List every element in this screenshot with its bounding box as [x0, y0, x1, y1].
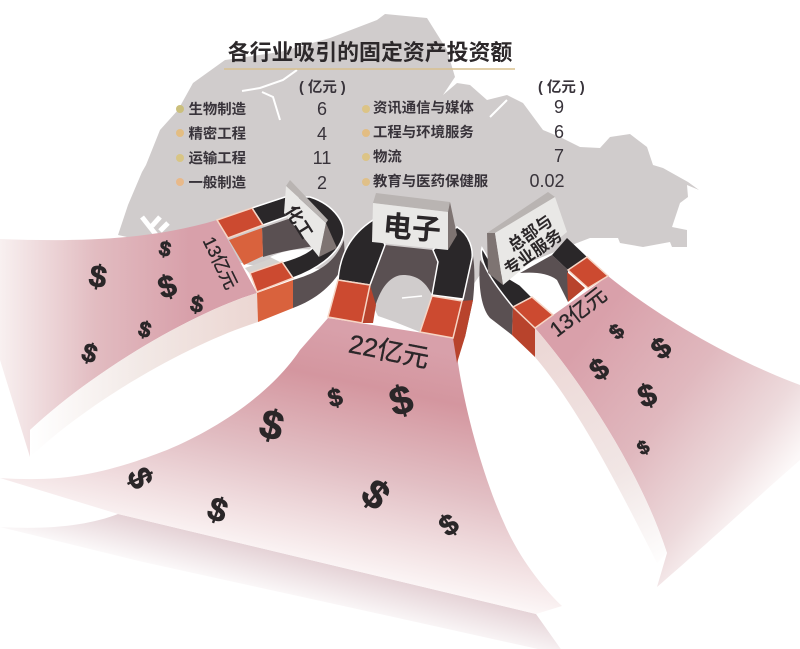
sign side: [487, 233, 503, 285]
dollar signs: headquarters beam: $: [605, 320, 630, 344]
dollar signs: chemical beam: $: [188, 290, 206, 318]
inner wall: [368, 245, 438, 315]
item: 资讯通信与媒体: 9: [554, 97, 564, 117]
left arm red: [328, 280, 370, 323]
dollar signs: electronics beam: $: [120, 462, 161, 494]
item: 资讯通信与媒体: [362, 97, 564, 117]
left beam front face: [30, 293, 258, 457]
dollar signs: chemical beam: $: [78, 336, 102, 370]
sign top: [286, 180, 328, 223]
dollar signs: headquarters beam: $: [645, 331, 678, 366]
dollar signs: electronics beam: [120, 377, 465, 543]
item: 运输工程: 11: [313, 148, 331, 168]
right unit: ( 亿元 ): [538, 79, 585, 96]
magnet: headquarters (right): [479, 192, 608, 357]
outer side red: [453, 300, 473, 363]
title: 各行业吸引的固定资产投资额: [228, 40, 512, 65]
right beam front face: [535, 328, 667, 563]
top arm red: [217, 208, 263, 238]
dollar signs: chemical beam: $: [136, 316, 154, 343]
sign side: [319, 223, 337, 257]
item: 一般制造: [176, 173, 327, 193]
legend: left list: [176, 79, 346, 193]
item: 生物制造: 生物制造: [188, 100, 247, 118]
item: 精密工程: 精密工程: [188, 124, 246, 142]
item: 生物制造: [176, 99, 327, 119]
right arm red: [420, 296, 462, 338]
sign front: [372, 203, 448, 250]
upper arm black: [552, 238, 587, 270]
lower arm red: [250, 262, 293, 292]
dollar signs: chemical beam: $: [86, 258, 109, 295]
left beam: [0, 220, 258, 457]
sign text: 化工: [281, 202, 317, 242]
outer side red: [512, 307, 535, 357]
inner wall orange: [229, 228, 263, 265]
sign text: 电子: [382, 210, 442, 247]
dollar signs: electronics beam: $: [433, 508, 465, 543]
dollar signs: headquarters beam: $: [634, 436, 654, 460]
right beam: [535, 276, 800, 587]
left unit: ( 亿元 ): [299, 79, 346, 96]
item: 物流: 物流: [373, 148, 402, 166]
item: 精密工程: [176, 124, 327, 144]
slot light strip: [245, 257, 282, 274]
item: 工程与环境服务: 工程与环境服务: [373, 123, 474, 141]
dollar signs: electronics beam: $: [385, 377, 418, 425]
item: 物流: 7: [554, 146, 564, 166]
item: 物流: [362, 146, 564, 166]
sign line 2: 专业服务: [501, 225, 566, 279]
item: 生物制造: 6: [317, 99, 327, 119]
dollar signs: headquarters beam: $: [633, 376, 661, 415]
dollar signs: chemical beam: [78, 237, 206, 370]
inner wall gray: [520, 255, 568, 302]
dollar signs: electronics beam: $: [203, 489, 233, 530]
left beam top face: [0, 220, 257, 457]
sign line 1: 总部与: [504, 211, 556, 255]
inner left red: [362, 285, 376, 323]
lower arm red: [513, 297, 553, 328]
item: 一般制造: 2: [317, 173, 327, 193]
item: 工程与环境服务: 6: [554, 122, 564, 142]
value label: 13亿元 chemical: 13亿元: [199, 233, 241, 293]
item: 教育与医药保健服: 教育与医药保健服: [373, 172, 489, 190]
inner wall gray: [262, 215, 320, 257]
legend: right list: [362, 79, 585, 191]
sign top: [373, 193, 450, 212]
top black arch: [252, 197, 344, 278]
upper arm red: [568, 257, 608, 288]
dollar signs: headquarters beam: [584, 320, 678, 460]
lower arm black: [481, 248, 532, 307]
right arm black: [432, 227, 472, 299]
dollar signs: electronics beam: $: [325, 383, 346, 413]
sign front: [284, 186, 326, 257]
dollar signs: headquarters beam: $: [584, 352, 615, 388]
inner wall red: [567, 272, 585, 302]
item: 资讯通信与媒体: 资讯通信与媒体: [373, 98, 474, 116]
value label: 13亿元 headquarters: 13亿元: [546, 283, 612, 342]
item: 教育与医药保健服: 0.02: [529, 171, 565, 191]
sign top: [487, 192, 555, 233]
outer side orange: [257, 280, 293, 322]
outer side gray: [479, 260, 513, 335]
outer side gray: [293, 240, 345, 308]
center beam: [0, 318, 562, 614]
sign front: [495, 197, 567, 285]
value label: 22亿元 electronics: 22亿元: [346, 329, 432, 373]
map silhouette: [118, 14, 699, 332]
item: 运输工程: [176, 148, 331, 168]
item: 运输工程: 运输工程: [188, 149, 246, 167]
dollar signs: chemical beam: $: [154, 267, 181, 306]
sign side: [448, 202, 457, 250]
dollar signs: chemical beam: $: [157, 237, 173, 262]
right beam top face: [535, 276, 800, 587]
dollar signs: electronics beam: $: [255, 400, 289, 450]
item: 教育与医药保健服: [362, 171, 565, 191]
center beam lower face: [0, 514, 565, 649]
title underline: [224, 68, 515, 70]
left arm black: [338, 220, 385, 285]
outer side gray: [463, 250, 474, 337]
dollar signs: electronics beam: $: [353, 471, 398, 519]
magnet: chemical (left): [217, 180, 345, 322]
item: 一般制造: 一般制造: [188, 174, 247, 192]
slot white: [270, 249, 312, 263]
magnet: electronics (center): [328, 193, 474, 363]
item: 精密工程: 4: [317, 124, 327, 144]
item: 工程与环境服务: [362, 122, 564, 142]
